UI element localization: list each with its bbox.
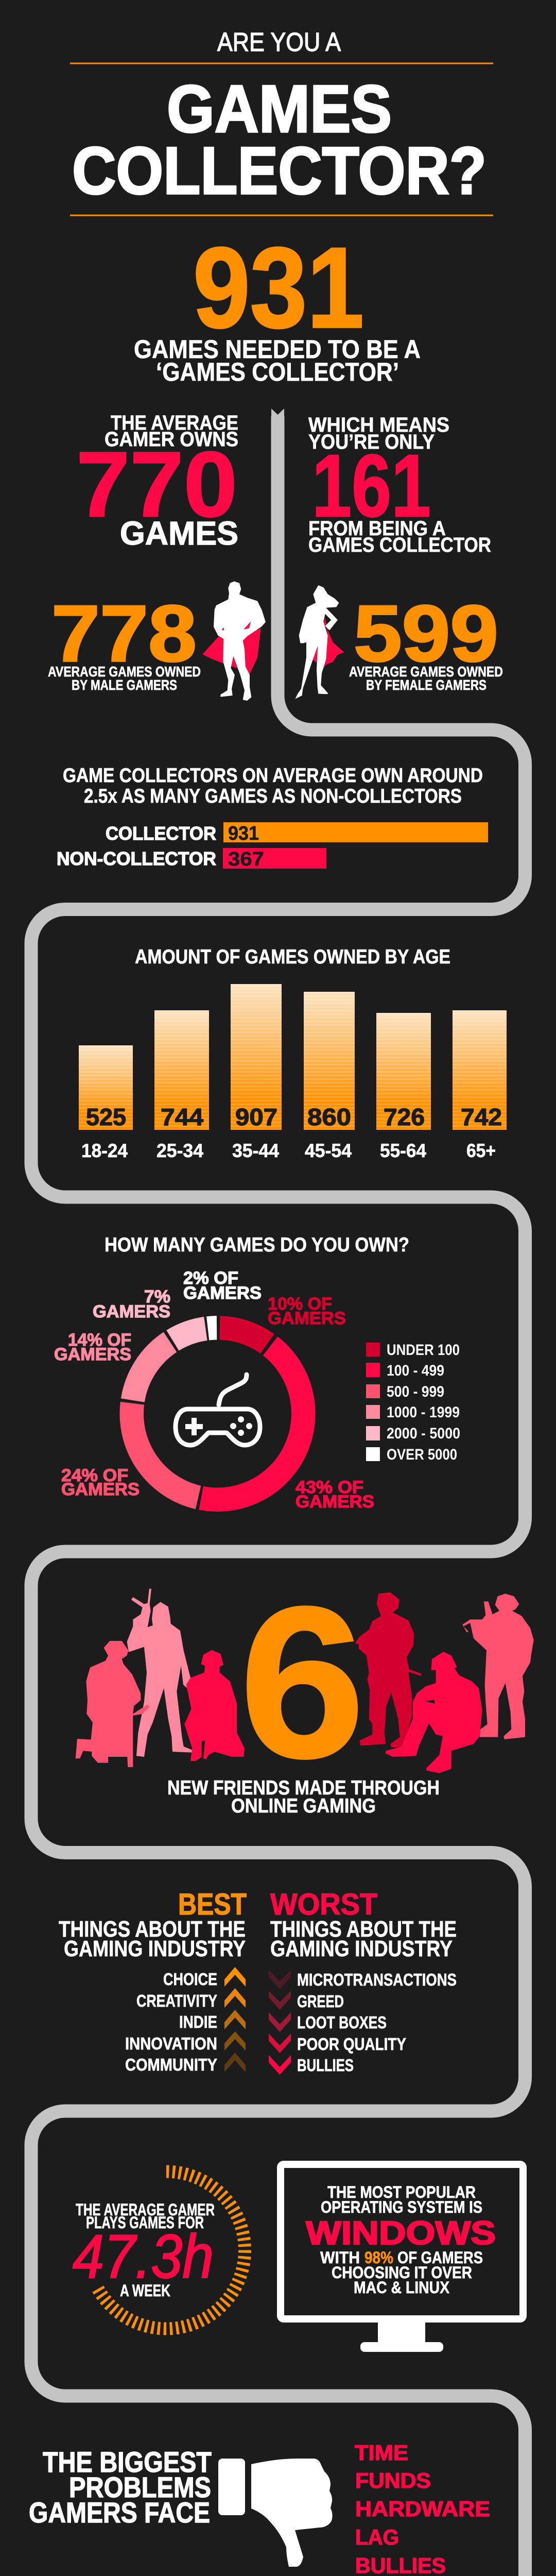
panel: new friends [76, 1562, 534, 1817]
monitor text: CHOOSING IT OVER [332, 2263, 472, 2282]
bar 18-24: 18-24 [81, 1140, 128, 1161]
problem list: LAG [355, 2525, 399, 2549]
digital readout: 47.3h [73, 2222, 214, 2291]
stat: male gamers 778: 778 [51, 589, 197, 678]
dial text: THE AVERAGE GAMER [76, 2200, 215, 2219]
stat: only 161 away [308, 414, 491, 556]
monitor text: THE MOST POPULAR [327, 2183, 476, 2201]
bar 55-64: 55-64 [380, 1140, 426, 1161]
stat: only 161 away: WHICH MEANS [308, 414, 449, 436]
worst list: LOOT BOXES [297, 2013, 387, 2032]
monitor text: OF GAMERS [397, 2248, 483, 2267]
best column: THINGS ABOUT THE [59, 1917, 246, 1942]
main title line 1: GAMES [167, 71, 392, 146]
dial text [73, 2200, 215, 2300]
bar 25-34 [154, 1010, 209, 1161]
worst list: MICROTRANSACTIONS [297, 1970, 457, 1989]
best list: COMMUNITY [125, 2055, 217, 2074]
stat: only 161 away: GAMES COLLECTOR [308, 534, 491, 556]
bar 55-64 [376, 1013, 431, 1161]
bar 25-34: 25-34 [157, 1140, 203, 1161]
bar 65+ [453, 1010, 507, 1161]
stat: only 161 away: FROM BEING A [308, 517, 446, 540]
caption: GAMES NEEDED TO BE A [134, 335, 421, 364]
heading: THE BIGGEST [43, 2446, 212, 2478]
bar: non-collector: 367 [228, 849, 264, 870]
legend: UNDER 100 [387, 1342, 460, 1359]
heading: PROBLEMS [69, 2471, 211, 2503]
heading: GAMERS FACE [29, 2496, 210, 2529]
icon: female superhero silhouette [295, 585, 344, 699]
legend: OVER 5000 [387, 1446, 457, 1463]
label 24%: GAMERS [61, 1480, 140, 1499]
worst column: WORST [270, 1888, 377, 1921]
caption: ‘GAMES COLLECTOR’ [156, 358, 399, 386]
number 931: 931 [193, 224, 364, 352]
stat: average gamer owns 770 [76, 412, 238, 552]
legend: 100 - 499 [387, 1362, 444, 1379]
best list: CREATIVITY [136, 1991, 217, 2010]
best list: INNOVATION [125, 2034, 217, 2053]
panel: best and worst [59, 1888, 457, 2075]
label 10%: GAMERS [268, 1309, 346, 1328]
worst list: POOR QUALITY [297, 2035, 406, 2054]
bar: non-collector: NON-COLLECTOR [57, 848, 216, 869]
caption [134, 335, 421, 386]
bar 55-64: 726 [384, 1104, 425, 1130]
worst list [297, 1970, 457, 2075]
problem list: TIME [355, 2441, 408, 2465]
stat: average gamer owns 770: GAMES [120, 515, 238, 552]
stat: only 161 away: YOU’RE ONLY [308, 431, 435, 453]
panel: collector vs non-collector [57, 765, 488, 870]
heading: AMOUNT OF GAMES OWNED BY AGE [135, 946, 450, 968]
worst column [269, 1888, 457, 2075]
heading [29, 2446, 212, 2529]
best list: INDIE [179, 2012, 217, 2031]
icon: thumbs down [218, 2459, 333, 2567]
monitor text: MAC & LINUX [354, 2278, 450, 2297]
label 7%: 7% [144, 1287, 170, 1307]
kicker: ARE YOU A [217, 27, 341, 57]
label 10% [268, 1294, 346, 1328]
bar 35-44 [231, 984, 282, 1161]
bar: non-collector [57, 848, 326, 870]
heading: 2.5x AS MANY GAMES AS NON-COLLECTORS [84, 785, 462, 807]
stat: male gamers 778: AVERAGE GAMES OWNED [48, 664, 201, 680]
dial text: A WEEK [120, 2281, 170, 2300]
stat: 931 games needed [134, 224, 421, 386]
dial ticks [98, 2172, 245, 2329]
heading: GAME COLLECTORS ON AVERAGE OWN AROUND [63, 765, 483, 787]
main title line 2: COLLECTOR? [72, 133, 486, 208]
label 7%: GAMERS [93, 1302, 170, 1321]
stat: average gamer owns 770: GAMER OWNS [105, 428, 238, 451]
legend: 1000 - 1999 [387, 1404, 460, 1421]
worst list: GREED [297, 1992, 344, 2011]
icon: game controller [176, 1375, 260, 1445]
winding grey path [0, 409, 525, 2576]
bar 65+: 742 [461, 1104, 502, 1130]
panel: monitor windows [281, 2164, 523, 2352]
stat: female gamers 599: 599 [354, 589, 498, 678]
title block [70, 27, 493, 216]
monitor text: OPERATING SYSTEM IS [321, 2198, 482, 2216]
stat: male gamers 778: BY MALE GAMERS [72, 677, 177, 693]
problem list [355, 2441, 490, 2576]
problem list: HARDWARE [355, 2497, 490, 2521]
legend: 500 - 999 [387, 1383, 444, 1400]
bar: collector: COLLECTOR [106, 823, 216, 844]
heading: HOW MANY GAMES DO YOU OWN? [105, 1234, 409, 1256]
icon: male superhero silhouette [202, 581, 266, 701]
bar: collector: 931 [228, 823, 259, 844]
bar 18-24 [79, 1045, 133, 1161]
monitor text: WITH [320, 2248, 360, 2267]
panel: games owned by age [79, 946, 507, 1161]
best list: CHOICE [163, 1970, 217, 1989]
legend: 2000 - 5000 [387, 1425, 460, 1442]
worst column: THINGS ABOUT THE [270, 1917, 457, 1942]
dial text: PLAYS GAMES FOR [86, 2213, 204, 2232]
label 43%: 43% OF [296, 1478, 363, 1497]
bar 45-54 [304, 992, 355, 1161]
bar 18-24: 525 [86, 1104, 126, 1130]
bar 35-44: 907 [235, 1104, 277, 1130]
label 2%: 2% OF [183, 1268, 238, 1288]
monitor text: WINDOWS [306, 2214, 496, 2251]
bar 45-54: 45-54 [305, 1140, 352, 1161]
panel: how many games do you own [54, 1234, 460, 1512]
number 6: 6 [239, 1562, 365, 1803]
caption: ONLINE GAMING [231, 1795, 376, 1817]
stat: female gamers 599: BY FEMALE GAMERS [366, 677, 486, 693]
worst column: GAMING INDUSTRY [270, 1936, 453, 1961]
stat: average gamer owns 770: THE AVERAGE [111, 412, 238, 434]
bar 65+: 65+ [466, 1140, 496, 1161]
worst chevrons [269, 1970, 291, 2075]
label 2% [183, 1268, 262, 1303]
soldiers left group [76, 1588, 245, 1767]
label 14%: 14% OF [68, 1330, 131, 1350]
label 24% [61, 1466, 140, 1499]
bar 45-54: 860 [307, 1104, 351, 1130]
label 43%: GAMERS [296, 1492, 374, 1512]
best list [125, 1970, 217, 2074]
donut chart [132, 1328, 303, 1500]
bar: collector [106, 822, 488, 844]
monitor text: 98% [364, 2248, 393, 2267]
label 14%: GAMERS [54, 1345, 131, 1364]
number 161: 161 [312, 436, 431, 535]
bar 25-34: 744 [161, 1104, 203, 1130]
label 2%: GAMERS [183, 1283, 262, 1303]
monitor text [306, 2183, 496, 2297]
panel: hours per week dial [73, 2172, 245, 2329]
caption [167, 1777, 440, 1817]
problem list: FUNDS [355, 2468, 431, 2493]
stat: female gamers 599: AVERAGE GAMES OWNED [349, 664, 503, 680]
label 14% [54, 1330, 131, 1364]
icon: monitor [281, 2164, 523, 2352]
best column [59, 1888, 247, 2074]
label 24%: 24% OF [61, 1466, 128, 1485]
panel: biggest problems [29, 2441, 490, 2576]
soldiers right group [355, 1592, 534, 1773]
best column: GAMING INDUSTRY [64, 1936, 246, 1961]
legend [366, 1342, 460, 1463]
label 43% [296, 1478, 374, 1512]
label 7% [93, 1287, 170, 1321]
caption: NEW FRIENDS MADE THROUGH [167, 1777, 440, 1799]
best chevrons [224, 1967, 246, 2072]
number 770: 770 [76, 433, 237, 536]
heading [63, 765, 483, 807]
label 10%: 10% OF [268, 1294, 332, 1314]
best column: BEST [178, 1888, 247, 1921]
worst list: BULLIES [297, 2056, 354, 2075]
bar 35-44: 35-44 [232, 1140, 279, 1161]
